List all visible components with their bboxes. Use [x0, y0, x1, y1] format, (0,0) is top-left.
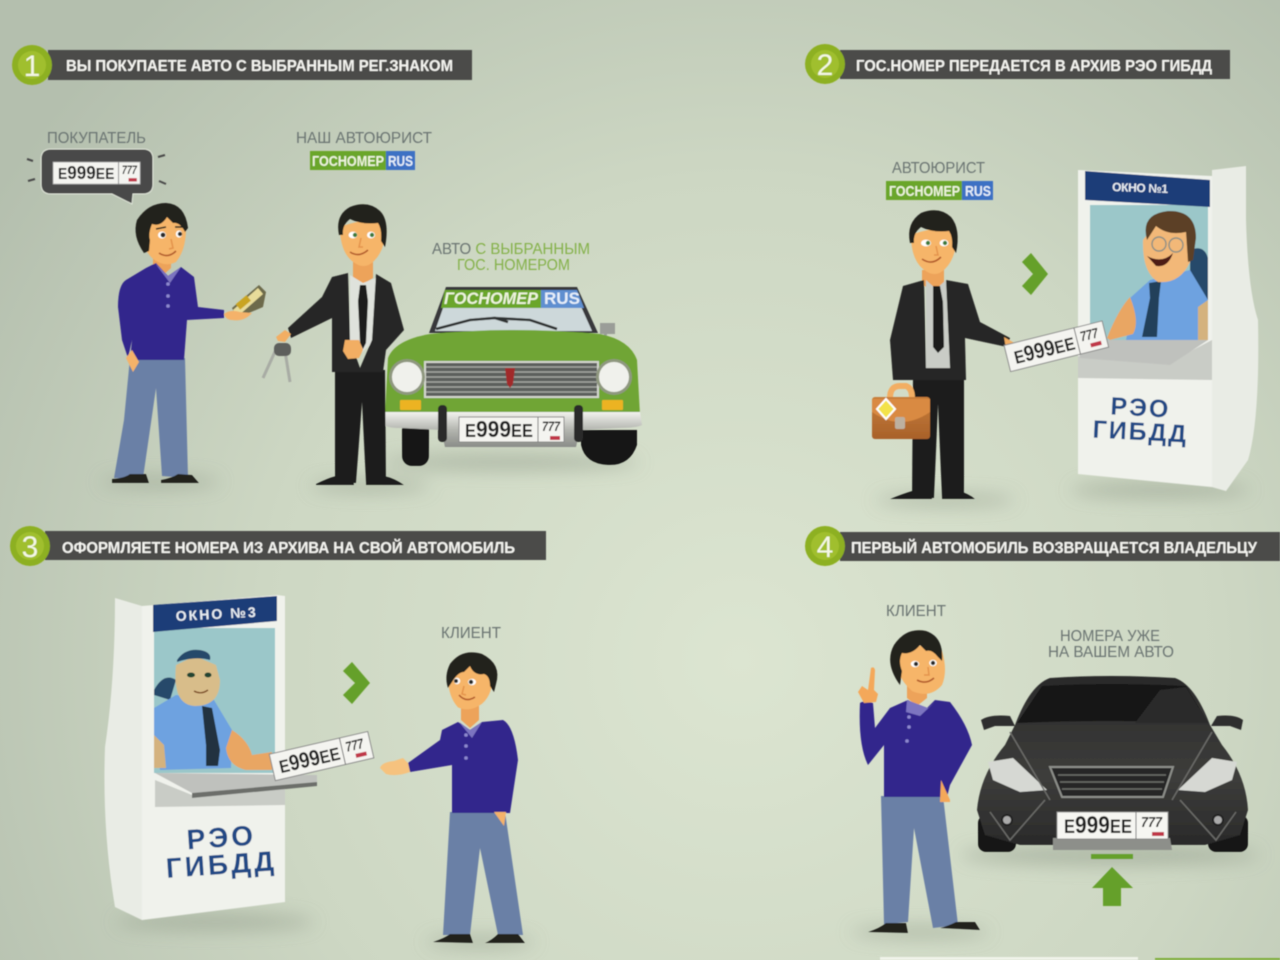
- person: buyer: [112, 203, 266, 483]
- step 3 header: [10, 526, 546, 566]
- plate handover 2: Е999ЕЕ: [1011, 330, 1077, 369]
- kiosk window 1: ГИБДД: [1092, 416, 1189, 448]
- kiosk window 1: ОКНО №1: [1112, 180, 1169, 196]
- step 1 header: 1: [24, 50, 40, 83]
- logo: gosnomer rus: RUS: [965, 183, 991, 200]
- plate handover 3: 777: [344, 735, 366, 755]
- kiosk window 3: [104, 595, 317, 920]
- label: buyer: ПОКУПАТЕЛЬ: [47, 130, 146, 147]
- plate: [459, 416, 564, 442]
- label: client: КЛИЕНТ: [441, 625, 501, 642]
- speech bubble with plate: 777: [122, 164, 137, 177]
- person: client with open hand: [380, 652, 525, 943]
- plate: Е999ЕЕ: [1064, 812, 1132, 839]
- logo: gosnomer rus: ГОСНОМЕР: [312, 153, 384, 170]
- label: plates on your car: НА ВАШЕМ АВТО: [1048, 644, 1174, 661]
- step 1 header: [12, 45, 472, 85]
- icon: money bundle: [224, 285, 266, 320]
- kiosk window 1: [1078, 166, 1258, 491]
- step 2 header: [805, 44, 1230, 84]
- speech bubble with plate: Е999ЕЕ: [58, 162, 114, 183]
- bottom edge strip: [880, 957, 1280, 960]
- step 1 header: ВЫ ПОКУПАЕТЕ АВТО С ВЫБРАННЫМ РЕГ.ЗНАКОМ: [66, 58, 453, 75]
- person: lawyer with keys: [263, 204, 404, 485]
- step 4 header: 4: [817, 531, 833, 564]
- plate: 777: [1141, 814, 1163, 831]
- plate handover 3: Е999ЕЕ: [276, 740, 342, 778]
- plate: Е999ЕЕ: [465, 416, 533, 442]
- label: car with chosen number: ГОС. НОМЕРОМ: [457, 257, 570, 274]
- plate: 777: [542, 418, 561, 434]
- label: plates on your car: [1048, 628, 1174, 661]
- arrow: green up arrow: [1091, 854, 1133, 906]
- label: car with chosen number: АВТО С ВЫБРАННЫМ: [432, 241, 590, 258]
- green car: RUS: [544, 289, 580, 308]
- label: car with chosen number: [432, 241, 590, 274]
- icon: briefcase: [872, 386, 930, 439]
- icon: raised finger hand: [858, 667, 878, 703]
- clerk: [154, 650, 272, 770]
- label: lawyer: АВТОЮРИСТ: [892, 160, 985, 177]
- step 4 header: ПЕРВЫЙ АВТОМОБИЛЬ ВОЗВРАЩАЕТСЯ ВЛАДЕЛЬЦУ: [851, 538, 1258, 557]
- label: our lawyer: НАШ АВТОЮРИСТ: [296, 130, 432, 147]
- black car: [977, 676, 1248, 852]
- plate: [1057, 812, 1168, 839]
- plate handover 2: [1004, 321, 1109, 372]
- kiosk window 3: ГИБДД: [165, 845, 278, 884]
- person: lawyer with briefcase: [872, 210, 1020, 499]
- soft ground shadows: [100, 454, 1260, 948]
- green car: ГОСНОМЕР: [444, 289, 539, 308]
- label: plates on your car: НОМЕРА УЖЕ: [1060, 628, 1160, 645]
- step 3 header: ОФОРМЛЯЕТЕ НОМЕРА ИЗ АРХИВА НА СВОЙ АВТОМОБИЛЬ: [62, 538, 515, 557]
- green car: [384, 287, 642, 466]
- step 4 header: [805, 526, 1280, 566]
- kiosk window 3: ОКНО №3: [175, 604, 256, 624]
- logo: gosnomer rus: ГОСНОМЕР: [889, 183, 960, 200]
- plate handover 2: 777: [1078, 324, 1101, 344]
- kiosk window 1: РЭО: [1110, 392, 1171, 424]
- step 3 header: 3: [22, 531, 38, 564]
- kiosk window 3: РЭО: [186, 820, 257, 855]
- step 2 header: ГОС.НОМЕР ПЕРЕДАЕТСЯ В АРХИВ РЭО ГИБДД: [856, 58, 1213, 75]
- label: client: КЛИЕНТ: [886, 603, 946, 620]
- plate handover 3: [269, 732, 374, 781]
- arrow: chevron right: [1022, 253, 1048, 295]
- icon: keys: [263, 343, 291, 382]
- arrow: chevron right: [343, 662, 370, 704]
- step 2 header: 2: [817, 49, 833, 82]
- logo: gosnomer rus: RUS: [388, 153, 413, 170]
- speech bubble with plate: [27, 149, 166, 204]
- clerk: [1107, 211, 1208, 340]
- person: client pointing up: [858, 630, 980, 933]
